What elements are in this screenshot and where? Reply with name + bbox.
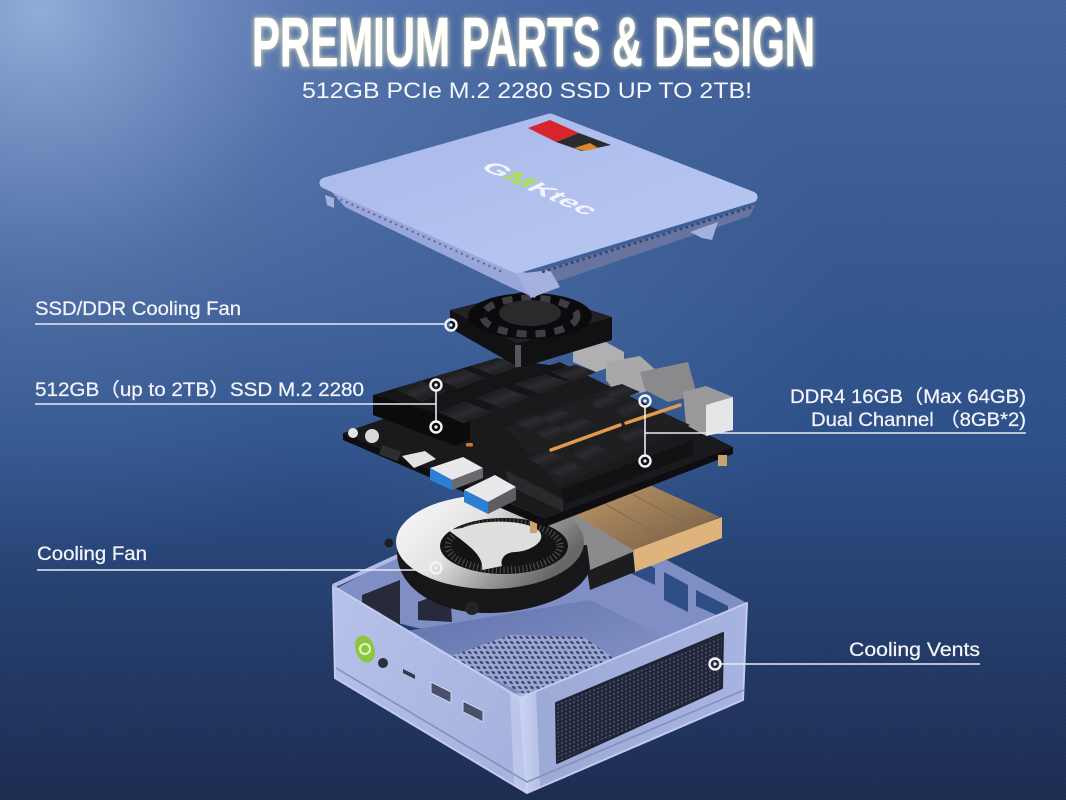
callout: ssd: 512GB（up to 2TB）SSD M.2 2280 [35,379,364,401]
callout: ssd ddr cooling fan: SSD/DDR Cooling Fan [35,299,241,320]
floor mesh [448,635,617,698]
fan hub [448,522,541,570]
inner left vents [362,580,452,630]
left front face [333,586,527,793]
callout: cooling fan [37,544,442,574]
wall openings [590,540,728,620]
fan lower mount [465,601,479,615]
case floor [400,600,700,712]
pcb underside [343,433,733,527]
callout: cooling fan: Cooling Fan [37,544,147,565]
vent holes right [542,207,752,272]
callout: ddr4 memory [640,386,1026,466]
side vent mesh [556,633,723,763]
ssd chips [397,358,596,423]
right front face [520,603,747,793]
power glyph [360,644,370,654]
blade ribs [448,522,560,570]
bottom groove [336,668,744,782]
lid top [325,119,752,268]
fan disc [396,495,584,589]
rear ports [573,341,733,436]
power button [352,633,378,665]
ethernet silver [606,356,660,398]
heatsink top [570,482,720,553]
callout: ssd ddr cooling fan [35,299,456,330]
ram chips [512,384,655,478]
fan screw tab [384,538,394,548]
audio jack [378,658,388,668]
fan blades [483,298,577,334]
orange led [466,443,473,446]
ram plate [505,388,690,487]
motherboard assembly [343,341,733,527]
callout: ssd [35,379,442,432]
ethernet right [640,362,697,402]
lid logo: GMKtec [474,159,605,219]
fan hub [499,300,561,326]
lid skirt left [330,190,542,298]
heatsink seams [598,490,692,537]
cooling fan with heatsink [384,482,722,615]
fan opening [468,293,592,339]
ssd block side [373,395,470,446]
right usb stack [683,386,733,436]
ssd plate [373,358,594,420]
small ssd ddr cooling fan [450,290,612,368]
usb-c silver port [402,451,436,468]
blade well [440,518,568,574]
lid stickers [528,120,611,151]
vent holes left [335,197,505,273]
subtitle: 512GB PCIe M.2 2280 SSD UP TO 2TB! [302,78,752,103]
callout: cooling vents [710,640,980,670]
fan outlet block [565,535,635,590]
usb 3 port 1 [430,457,483,490]
standoff [530,518,537,533]
ram heatsink blocks [560,440,693,504]
callout: ddr4 memory: DDR4 16GB（Max 64GB) [790,386,1026,408]
hdmi port silver [573,341,624,372]
right port side [706,397,733,436]
mini PC case base [333,535,747,793]
right standoff [718,455,727,466]
usb 3 port 2 [464,475,516,514]
rear rim [333,556,398,586]
ram orange bar [551,405,680,450]
fan frame top [450,290,612,343]
callout: ddr4 memory: Dual Channel （8GB*2) [811,409,1026,431]
case corner edge [510,692,540,793]
heatsink front [633,517,722,572]
callout: cooling vents: Cooling Vents [849,640,980,661]
fan outlet top [545,512,635,570]
lid skirt right [530,205,755,288]
front ram stick end [505,470,563,512]
usb-a port 2 [463,701,483,722]
fan frame side [450,310,612,368]
case interior walls [337,535,747,650]
fan housing rim [397,545,590,613]
lid clips [325,195,718,298]
frame highlight [515,345,521,367]
lid [325,119,755,298]
front audio ports [348,428,401,461]
usb-a port 1 [431,682,451,703]
usb-c port [403,669,415,679]
pcb [343,362,733,518]
